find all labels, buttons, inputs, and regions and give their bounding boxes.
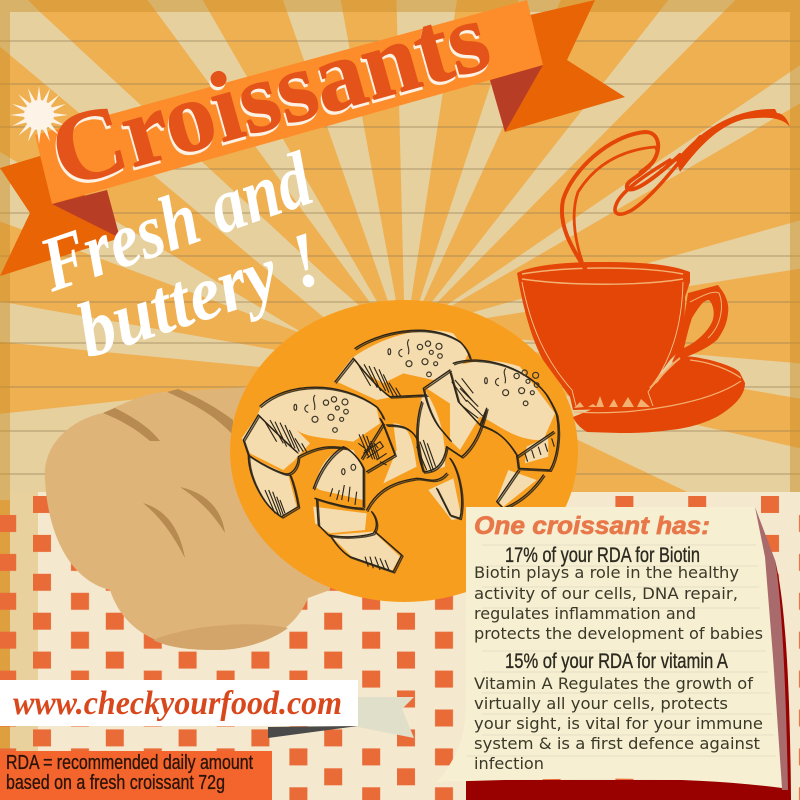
vitamin A block: 15% of your RDA for vitamin A [505,650,728,673]
website banner: www.checkyourfood.com [13,685,342,722]
sunburst icon [10,86,68,144]
bread loaf [45,387,330,650]
RDA footnote: based on a fresh croissant 72g [6,772,225,794]
website banner [0,680,414,738]
vitamin A block: system & is a first defence against [474,734,760,753]
biotin block: 17% of your RDA for Biotin [505,544,700,567]
coffee cup with steam [517,109,790,433]
note paper panel [437,507,791,800]
vitamin A block: your sight, is vital for your immune [474,714,763,733]
left ribbon tail [0,153,120,276]
biotin block: regulates inflammation and [474,604,696,623]
croissants illustration [242,330,560,573]
panel heading: One croissant has: [474,512,710,540]
subtitle [28,134,331,374]
biotin block: protects the development of babies [474,624,763,643]
biotin block [474,544,763,643]
RDA footnote: RDA = recommended daily amount [6,752,253,774]
vitamin A block: Vitamin A Regulates the growth of [474,674,753,693]
subtitle: buttery ! [66,214,331,374]
orange circle [230,300,578,602]
ribbon banner [0,0,625,276]
biotin block: activity of our cells, DNA repair, [474,584,738,603]
vitamin A block [474,650,763,773]
checked tablecloth [0,492,800,800]
subtitle: Fresh and [28,134,323,308]
vitamin A block: infection [474,754,544,773]
vitamin A block: virtually all your cells, protects [474,694,728,713]
steam [562,109,790,275]
RDA footnote [0,751,272,800]
biotin block: Biotin plays a role in the healthy [474,563,739,582]
